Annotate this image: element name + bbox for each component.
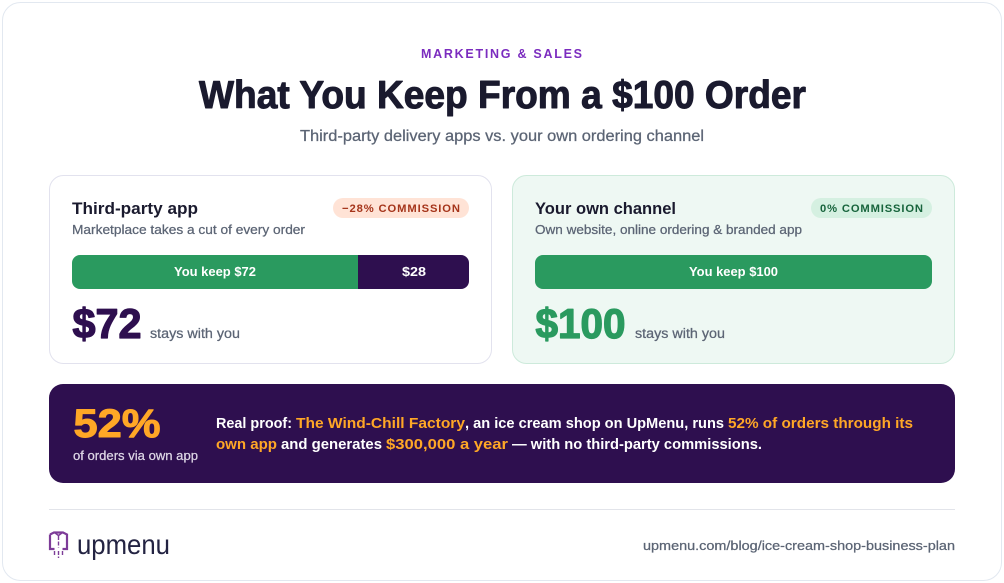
source url: upmenu.com/blog/ice-cream-shop-business-plan xyxy=(643,538,955,553)
full bar: $100 kept xyxy=(535,255,932,289)
third-party heading: Third-party app xyxy=(72,199,198,218)
proof text: 52% of orders through its xyxy=(728,416,913,432)
commission badge: 0% xyxy=(811,198,932,218)
proof text: and generates xyxy=(281,437,382,453)
stat: $100: $100 xyxy=(536,300,626,347)
proof text: $300,000 a year xyxy=(386,437,508,453)
eyebrow: MARKETING & SALES xyxy=(421,47,582,61)
proof text: , an ice cream shop on UpMenu, runs xyxy=(465,416,724,432)
commission badge: 28%: −28% COMMISSION xyxy=(342,203,460,215)
stat caption: of orders via own app xyxy=(73,449,198,463)
commission badge: 28% xyxy=(333,198,469,218)
stat caption: stays with you xyxy=(635,326,725,341)
stacked bar: $72 kept and $28 fee xyxy=(72,255,469,289)
icon: open book xyxy=(50,532,67,558)
stat: 52%: 52% xyxy=(74,402,160,446)
stat caption: stays with you xyxy=(150,326,240,341)
proof text xyxy=(216,416,913,453)
subtitle: Third-party delivery apps vs. your own ordering channel xyxy=(300,128,704,145)
panel: own channel xyxy=(512,176,954,364)
third-party description: Marketplace takes a cut of every order xyxy=(72,222,306,237)
proof banner xyxy=(49,384,955,483)
stacked bar: $72 kept and $28 fee: $28 xyxy=(402,264,426,279)
stat: $72: $72 xyxy=(72,300,142,347)
stacked bar: $72 kept and $28 fee: You keep $72 xyxy=(174,264,256,279)
proof text: — with no third-party commissions. xyxy=(512,437,762,453)
title: What You Keep From a $100 Order xyxy=(199,74,806,117)
own channel heading: Your own channel xyxy=(535,199,676,218)
upmenu logo xyxy=(50,529,170,560)
proof text: The Wind-Chill Factory xyxy=(296,416,465,432)
panel: third-party app xyxy=(50,176,492,364)
wordmark: upmenu xyxy=(77,529,170,560)
commission badge: 0%: 0% COMMISSION xyxy=(820,203,923,215)
proof text: Real proof: xyxy=(216,416,292,432)
full bar: $100 kept: You keep $100 xyxy=(689,264,778,279)
proof text: own app xyxy=(216,437,277,453)
own channel description: Own website, online ordering & branded app xyxy=(535,222,802,237)
